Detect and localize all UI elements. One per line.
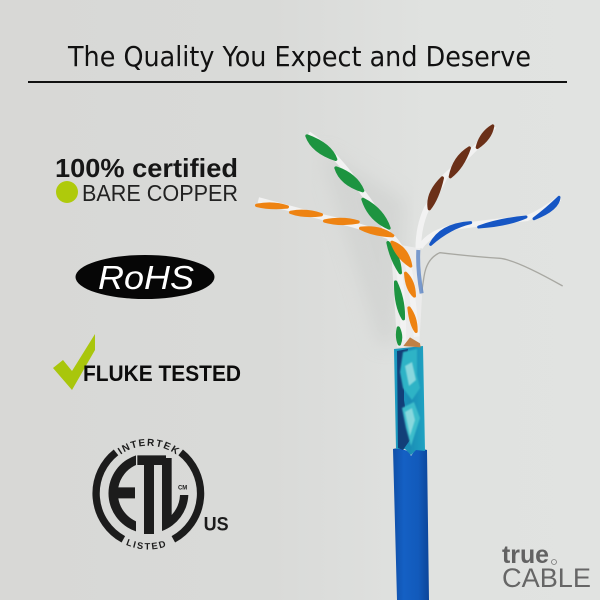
foil shield xyxy=(394,346,425,455)
icon: check mark xyxy=(53,334,95,390)
ring text path top xyxy=(121,446,177,455)
green pair xyxy=(307,134,403,344)
logo: ETL listed xyxy=(92,438,229,550)
wires xyxy=(257,126,563,347)
orange pair xyxy=(257,200,417,337)
foil sheen lower xyxy=(405,408,415,436)
title: The Quality You Expect and Deserve xyxy=(67,40,531,73)
white strand xyxy=(308,134,403,340)
ring text path bottom xyxy=(126,545,171,549)
CM mark: CM xyxy=(178,485,187,491)
orange twists xyxy=(257,204,416,331)
foil sheen upper xyxy=(405,362,416,386)
letter T xyxy=(137,455,166,534)
Fluke tested text: FLUKE TESTED xyxy=(83,361,241,386)
certified text: 100% certified xyxy=(55,153,238,183)
RoHS text: RoHS xyxy=(98,259,194,296)
foil highlight upper xyxy=(400,349,420,400)
true text: true xyxy=(502,541,549,569)
letter E xyxy=(108,455,136,531)
green twists xyxy=(307,136,403,344)
drain wire xyxy=(415,253,563,334)
white strand xyxy=(420,198,559,247)
white strand xyxy=(418,126,494,248)
INTERTEK text: INTERTEK xyxy=(118,438,180,454)
title underline xyxy=(28,81,567,83)
blue twists xyxy=(431,197,559,244)
outer ring xyxy=(96,452,201,539)
letter L xyxy=(162,458,188,531)
badge: Fluke tested xyxy=(53,334,241,390)
foil highlight lower xyxy=(402,402,420,446)
CABLE text: CABLE xyxy=(502,563,591,593)
LISTED text: LISTED xyxy=(126,539,166,550)
foil base xyxy=(394,346,425,455)
cable xyxy=(393,346,429,600)
US text: US xyxy=(204,514,229,535)
registered circle xyxy=(552,560,556,564)
wire bundle core xyxy=(391,243,422,347)
badge: 100% certified bare copper xyxy=(55,153,238,206)
brown twists xyxy=(429,126,493,209)
green dot xyxy=(56,181,78,203)
cable jacket xyxy=(393,448,429,600)
wall shadow xyxy=(320,150,405,345)
copper ends xyxy=(403,337,421,347)
blue core xyxy=(418,250,422,293)
black ellipse xyxy=(76,255,214,299)
badge: RoHS xyxy=(76,255,214,299)
foil dark fold xyxy=(397,349,410,450)
logo: trueCABLE xyxy=(502,541,591,593)
brown pair xyxy=(418,126,494,248)
white strand xyxy=(258,200,417,337)
bare copper text: BARE COPPER xyxy=(82,180,238,206)
blue pair xyxy=(418,197,559,293)
